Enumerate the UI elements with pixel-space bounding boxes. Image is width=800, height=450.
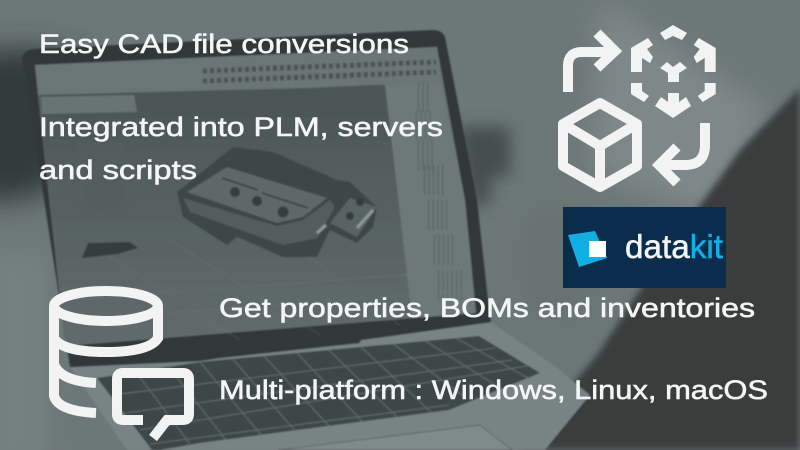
text: Easy CAD file conversions: Easy CAD file conversions bbox=[39, 29, 409, 59]
icon: solid cube bbox=[563, 103, 637, 187]
logo mark bbox=[568, 231, 607, 267]
CAD part bbox=[177, 147, 377, 257]
text: Integrated into PLM, servers and scripts bbox=[39, 112, 443, 185]
text: Integrated into PLM, servers and scripts: and scripts bbox=[39, 155, 197, 185]
laptop base bbox=[70, 322, 590, 450]
text: Multi-platform : Windows, Linux, macOS: Multi-platform : Windows, Linux, macOS bbox=[219, 375, 768, 405]
laptop screen bbox=[22, 30, 491, 367]
icon: dashed hexagon with arrows bbox=[631, 25, 716, 118]
logo: datakit bbox=[563, 207, 726, 288]
icon: CAD conversion cycle bbox=[563, 25, 716, 187]
arrow: up and right bbox=[568, 33, 615, 92]
arrow: down and left bbox=[659, 123, 705, 183]
small part bbox=[82, 242, 138, 258]
text: Integrated into PLM, servers and scripts: Integrated into PLM, servers bbox=[39, 112, 443, 142]
grid floor bbox=[70, 240, 472, 340]
logo wordmark: datakit bbox=[625, 228, 723, 265]
toolbar icons bbox=[203, 62, 436, 81]
text: Get properties, BOMs and inventories: Get properties, BOMs and inventories bbox=[219, 293, 755, 323]
trackpad bbox=[278, 425, 512, 450]
keyboard bbox=[97, 336, 540, 450]
icon: database with chat bubble bbox=[54, 291, 189, 438]
person silhouette right bbox=[517, 88, 800, 450]
icon: database bbox=[54, 291, 158, 413]
side panel rows bbox=[416, 97, 462, 285]
icon: chat bubble bbox=[117, 373, 189, 438]
